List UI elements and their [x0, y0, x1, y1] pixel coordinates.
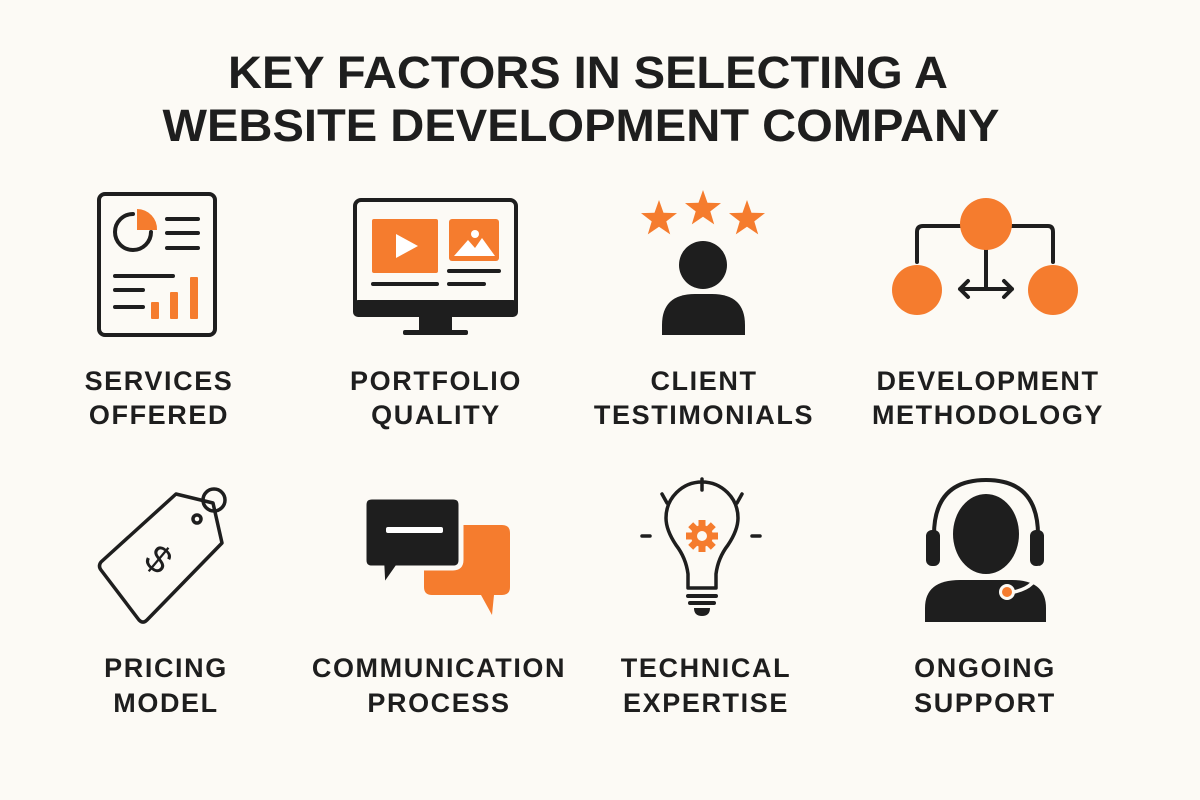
- icon: light bulb with gear: [642, 479, 760, 616]
- icon: price tag: $: [136, 537, 180, 583]
- title: WEBSITE DEVELOPMENT COMPANY: [162, 100, 999, 151]
- label: services offered: [85, 366, 233, 430]
- label: technical expertise: EXPERTISE: [623, 688, 789, 718]
- title: KEY FACTORS IN SELECTING A: [228, 47, 948, 98]
- icon: communication bubbles: [364, 497, 510, 615]
- label: development methodology: [872, 366, 1104, 430]
- label: technical expertise: [621, 653, 791, 718]
- label: portfolio quality: QUALITY: [371, 400, 501, 430]
- label: communication process: [312, 653, 566, 718]
- label: development methodology: DEVELOPMENT: [876, 366, 1100, 396]
- label: pricing model: [104, 653, 228, 718]
- label: services offered: OFFERED: [89, 400, 229, 430]
- label: communication process: COMMUNICATION: [312, 653, 566, 683]
- label: technical expertise: TECHNICAL: [621, 653, 791, 683]
- icon: client testimonials: [641, 190, 765, 335]
- icon: support headset: [925, 480, 1046, 622]
- label: communication process: PROCESS: [367, 688, 511, 718]
- icon: development methodology: [892, 198, 1078, 315]
- label: ongoing support: [914, 653, 1056, 718]
- label: client testimonials: [594, 366, 814, 430]
- icon: price tag: [100, 489, 225, 622]
- label: pricing model: MODEL: [113, 688, 219, 718]
- label: pricing model: PRICING: [104, 653, 228, 683]
- icon: services document: [99, 194, 215, 335]
- label: development methodology: METHODOLOGY: [872, 400, 1104, 430]
- label: portfolio quality: PORTFOLIO: [350, 366, 522, 396]
- label: portfolio quality: [350, 366, 522, 430]
- label: client testimonials: TESTIMONIALS: [594, 400, 814, 430]
- label: ongoing support: SUPPORT: [914, 688, 1056, 718]
- icon: monitor portfolio: [353, 200, 518, 335]
- label: ongoing support: ONGOING: [914, 653, 1056, 683]
- label: client testimonials: CLIENT: [650, 366, 758, 396]
- title: [162, 47, 999, 151]
- label: services offered: SERVICES: [85, 366, 233, 396]
